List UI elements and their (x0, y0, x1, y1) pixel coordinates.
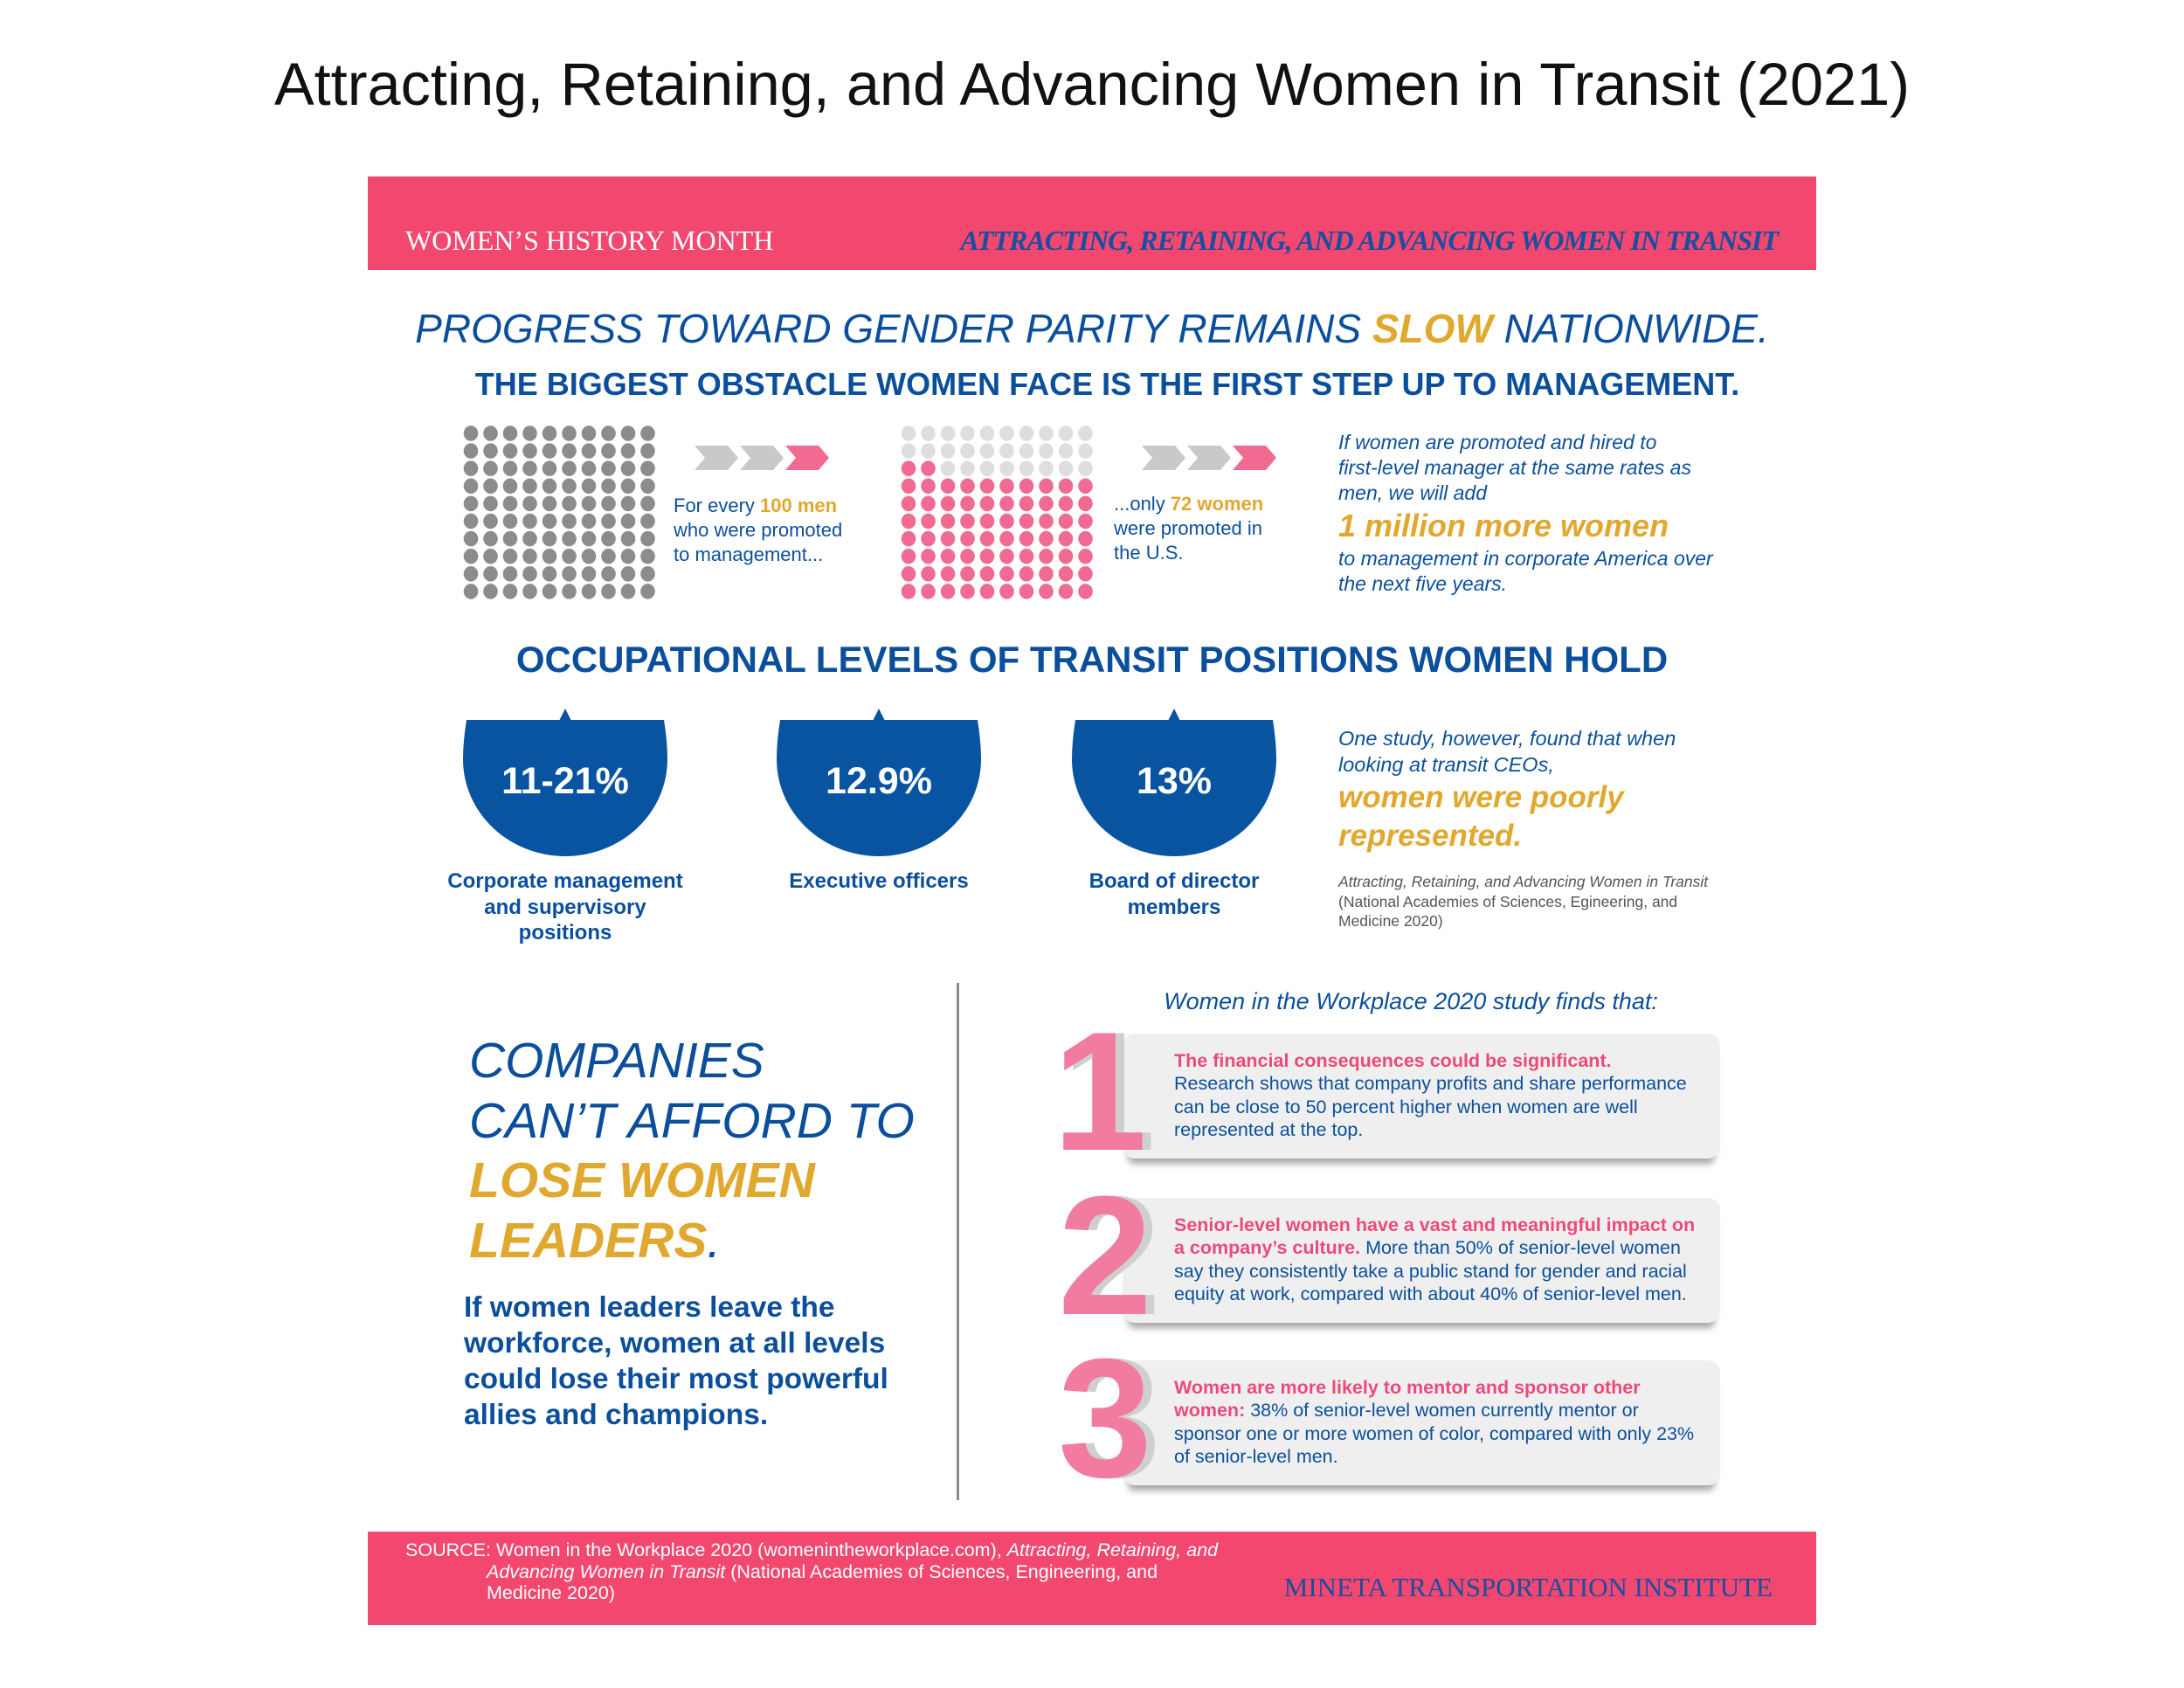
label: corporate management (447, 869, 683, 944)
text: 1 million more women: the next five years. (1338, 572, 1507, 595)
title: Attracting, Retaining, and Advancing Women in Transit (2021) (274, 51, 1910, 118)
text: CEOs poorly represented: women were poorly (1338, 780, 1624, 814)
text: CEOs poorly represented: represented. (1338, 819, 1522, 853)
source text: Medicine 2020) (487, 1582, 615, 1603)
citation: (National Academies of Sciences, Egineering, and (1338, 893, 1677, 910)
label: board of directors: members (1128, 895, 1220, 919)
source text: SOURCE: Women in the Workplace 2020 (womenintheworkplace.com), Attracting, Retaining, and (405, 1539, 1218, 1560)
text: 1 million more women: men, we will add to management in corporate America over (1338, 481, 1713, 570)
citation: Attracting, Retaining, and Advancing Women in Transit (1338, 873, 1708, 890)
text: 1 million more women: If women are promoted and hired to (1338, 431, 1656, 453)
shield: 13%: 13% (1137, 760, 1212, 802)
text: companies can't afford: LOSE WOMEN (469, 1152, 815, 1208)
citation: Medicine 2020) (1338, 912, 1443, 930)
text: 72 women: ...only 72 women (1114, 493, 1263, 515)
text: 100 men: to management... (674, 543, 823, 565)
text: 100 men: For every 100 men (674, 495, 837, 516)
arrows 1 (695, 446, 829, 470)
paragraph: women leaders leave: workforce, women at all levels (464, 1327, 885, 1359)
card 2 (1058, 1161, 1720, 1351)
footer band (368, 1532, 1816, 1625)
text: companies can't afford: COMPANIES (469, 1033, 764, 1089)
shield: 12.9% (777, 709, 981, 856)
text: 100 men: who were promoted (674, 519, 842, 541)
institute name: MINETA TRANSPORTATION INSTITUTE (1284, 1572, 1773, 1602)
subheading: women in workplace: Women in the Workplace 2020 study finds that: (1164, 988, 1658, 1014)
card 1 (1053, 997, 1720, 1186)
text: 100 men (674, 495, 842, 565)
paragraph: women leaders leave (463, 1291, 888, 1431)
dot grid: 72 women (902, 425, 1093, 599)
source text: Advancing Women in Transit (National Academies of Sciences, Engineering, and (487, 1560, 1158, 1581)
card 3 (1058, 1324, 1720, 1513)
text: 72 women (1114, 493, 1263, 564)
card 1: Research shows that company profits and share performance can be close to 50 percent higher when women are well represented at the top. (1174, 1073, 1687, 1140)
header band (368, 176, 1816, 270)
text: companies can't afford: LEADERS. (469, 1213, 721, 1269)
source text (405, 1539, 1219, 1603)
dot grid: 100 men (463, 425, 655, 599)
label: corporate management: and supervisory (484, 895, 646, 919)
heading: biggest obstacle: THE BIGGEST OBSTACLE WOMEN FACE IS THE FIRST STEP UP TO MANAGEMENT. (475, 366, 1739, 402)
text: CEOs poorly represented: looking at transit CEOs, (1338, 753, 1554, 776)
heading: occupational levels: OCCUPATIONAL LEVELS OF TRANSIT POSITIONS WOMEN HOLD (516, 639, 1668, 680)
number 3: 3 (1058, 1324, 1152, 1513)
label: corporate management: Corporate management (447, 869, 683, 893)
card 2: Senior-level women have a vast and meaningful impact on a company’s culture. More than 50% of senior-level women say they consistently take a public stand for gender and racial equity at work, compared with about 40% of senior-level men. (1174, 1214, 1695, 1304)
shield: 12.9%: 12.9% (826, 760, 932, 802)
label: corporate management: positions (519, 921, 612, 944)
shield: 11-21% (463, 709, 667, 856)
arrows 2 (1142, 446, 1276, 470)
paragraph: women leaders leave: allies and champions. (464, 1399, 768, 1431)
header left text: WOMEN’S HISTORY MONTH (405, 225, 773, 256)
shield: 13% (1072, 709, 1276, 856)
text: 1 million more women: first-level manager at the same rates as (1338, 456, 1691, 479)
text: 72 women: the U.S. (1114, 542, 1183, 564)
text: CEOs poorly represented: One study, however, found that when (1338, 727, 1676, 750)
text: 1 million more women: 1 million more women (1338, 508, 1669, 543)
card 1: The financial consequences could be significant. (1174, 1050, 1612, 1071)
shield: 11-21%: 11-21% (501, 760, 629, 802)
text: companies can't afford (469, 1033, 915, 1269)
number 1: 1 (1053, 997, 1147, 1186)
number 2: 2 (1058, 1161, 1152, 1351)
citation (1337, 873, 1709, 930)
paragraph: women leaders leave: could lose their most powerful (464, 1363, 888, 1395)
card 3: Women are more likely to mentor and sponsor other women: 38% of senior-level women currently mentor or sponsor one or more women of color, compared with only 23% of senior-level men. (1174, 1377, 1694, 1467)
paragraph: women leaders leave: If women leaders leave the (464, 1291, 835, 1324)
label: board of directors (1089, 869, 1259, 919)
header right text: ATTRACTING, RETAINING, AND ADVANCING WOMEN IN TRANSIT (960, 225, 1778, 256)
text: companies can't afford: CAN’T AFFORD TO (469, 1092, 915, 1148)
label: executive officers: Executive officers (789, 869, 969, 893)
label: board of directors: Board of director (1089, 869, 1259, 893)
text: CEOs poorly represented (1338, 727, 1676, 853)
text: 1 million more women (1338, 431, 1714, 595)
heading: progress: PROGRESS TOWARD GENDER PARITY REMAINS SLOW NATIONWIDE. (415, 306, 1769, 351)
text: 72 women: were promoted in (1114, 517, 1262, 539)
